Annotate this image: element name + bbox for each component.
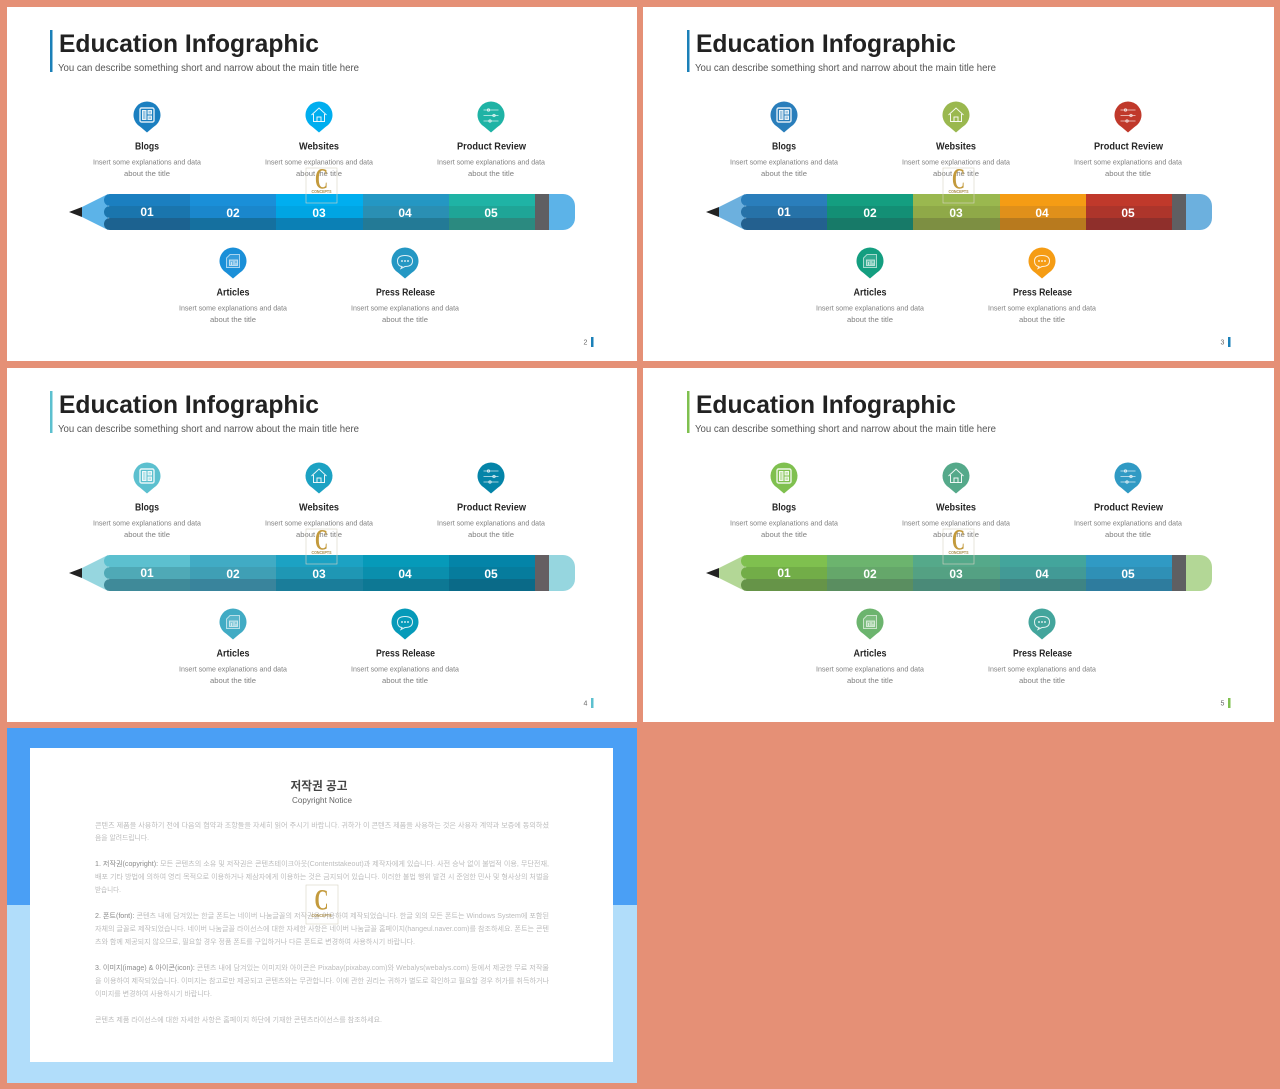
label: blogs: Insert some explanations and data [730,158,838,166]
label: articles: Insert some explanations and data [179,664,287,674]
clause 1 copyright: 받습니다. [95,885,121,894]
label: articles: about the title [847,676,893,685]
watermark: C [952,162,965,196]
label: product review [1074,142,1182,178]
clause 2 font: 츠와 함께 제공되지 않으므로, 필요할 경우 정품 폰트를 구입하거나 다른 폰트로 변경하여 사용하시기 바랍니다. [95,937,415,946]
label: websites: about the title [296,530,342,539]
watermark [943,162,974,203]
label: press release [988,288,1096,324]
subtitle: You can describe something short and narrow about the main title here [695,62,996,74]
label: articles [179,648,287,685]
icon: product review pin [1114,102,1142,132]
panel: copyright notice slide [7,728,637,1083]
clause 2 font: 2. 폰트(font): 콘텐츠 내에 담겨있는 한글 폰트는 네이버 나눔글꼴의 저작권을 이용하여 제작되었습니다. 한글 외의 모든 폰트는 Windows System에 포함된 [95,911,549,920]
label: product review: Product Review [1094,142,1163,152]
label: websites: Insert some explanations and data [265,518,373,528]
page number: 2 [584,340,588,346]
page number [1221,698,1230,708]
label: websites [265,502,373,539]
label: articles: Insert some explanations and data [179,304,287,312]
label: press release: about the title [1019,315,1065,324]
pencil chart: 02 [863,206,877,220]
pencil chart: 02 [863,567,877,581]
label: blogs [93,502,201,539]
label: product review: Product Review [457,142,526,152]
icon: product review pin [478,463,504,494]
page number: 4 [584,700,588,708]
label: product review: Insert some explanations and data [1074,158,1182,166]
icon: press release pin [1028,248,1056,278]
label: press release: Press Release [1013,648,1072,660]
icon: product review pin [478,102,504,132]
label: press release: Insert some explanations and data [351,304,459,312]
copyright intro text: 콘텐츠 제품을 사용하기 전에 다음의 협약과 조항들을 자세히 읽어 주시기 바랍니다. 귀하가 이 콘텐츠 제품을 사용하는 것은 사용자 계약과 보증에 동의하셨 [95,820,550,830]
label: articles [816,288,924,324]
label: websites: Insert some explanations and data [265,158,373,166]
title: Education Infographic [696,30,956,58]
label: articles [179,288,287,324]
icon: articles pin [220,609,246,640]
label: product review: Insert some explanations and data [437,158,545,166]
watermark: C [952,524,965,556]
pencil chart: 01 [777,205,791,219]
copyright intro text: 음을 알려드립니다. [95,833,149,842]
watermark: CONCEPTS [948,189,969,194]
clause 1 copyright: 1. 저작권(copyright): 모든 콘텐츠의 소유 및 저작권은 콘텐츠테이크아웃(Contentstakeout)과 제작자에게 있습니다. 사전 승낙 없이 불법적 이용, 무단전재, [95,859,549,868]
clause 2 font [95,911,549,946]
pencil chart: 05 [484,206,498,220]
icon: blogs pin [770,102,798,132]
panel: slide 5 green palette [643,368,1274,722]
icon: blogs pin [134,102,160,132]
icon: press release pin [392,609,418,640]
label: product review [437,142,545,178]
clause 3 image and icon: 을 이용하여 제작되었습니다. 이미지는 참고로만 제공되고 콘텐츠와는 무관합니다. 이에 관한 권리는 귀하가 별도로 확인하고 필요할 경우 허가를 취득하거나 [95,976,550,985]
title accent bar [687,391,690,433]
pencil chart: 04 [1035,206,1049,220]
label: press release [988,648,1096,685]
label: press release: Insert some explanations and data [988,664,1096,674]
icon: websites pin [306,102,332,132]
watermark [306,162,337,203]
label: product review: Product Review [1094,502,1163,514]
pencil chart: 03 [949,206,963,220]
icon: articles pin [220,248,246,278]
page number [584,698,594,708]
pencil chart: 05 [484,567,498,581]
label: websites: about the title [296,169,342,178]
icon: blogs pin [134,463,160,494]
icon: articles pin [856,248,884,278]
label: product review: about the title [468,530,514,539]
label: press release: Press Release [376,288,435,298]
label: websites: Insert some explanations and data [902,518,1010,528]
pencil chart [706,555,1212,591]
label: articles: Insert some explanations and data [816,664,924,674]
copyright subheading: Copyright Notice [292,795,352,805]
clause 1 copyright: 배포 기타 방법에 의하여 영리 목적으로 이용하거나 제삼자에게 이용하는 것은 금지되어 있습니다. 이러한 불법 행위 발견 시 준엄한 민사 및 형사상의 처벌을 [95,872,550,881]
closing note: 콘텐츠 제품 라이선스에 대한 자세한 사항은 홈페이지 하단에 기재한 콘텐츠라이선스를 참조하세요. [95,1015,382,1024]
label: blogs [93,142,201,178]
subtitle: You can describe something short and narrow about the main title here [695,423,996,435]
page number: 5 [1221,700,1225,708]
pencil chart: 01 [140,566,154,580]
label: press release: about the title [382,315,428,324]
icon: press release pin [1028,609,1056,640]
pencil chart: 02 [226,206,240,220]
label: press release [351,648,459,685]
title accent bar [50,391,52,433]
label: articles: Articles [854,648,887,660]
pencil chart: 01 [140,205,154,219]
icon: websites pin [942,102,970,132]
icon: press release pin [392,248,418,278]
title: Education Infographic [59,30,319,58]
label: blogs: about the title [124,169,170,178]
label: articles: about the title [847,315,893,324]
watermark [306,524,337,564]
label: websites [902,142,1010,178]
label: press release: about the title [382,676,428,685]
pencil chart: 03 [949,567,963,581]
watermark: C [314,884,328,916]
label: blogs: Insert some explanations and data [93,158,201,166]
label: press release: Press Release [1013,288,1072,298]
label: blogs: about the title [761,169,807,178]
page number [1221,337,1230,347]
label: articles: about the title [210,315,256,324]
pencil chart: 02 [226,567,240,581]
pencil chart [706,194,1212,230]
title: Education Infographic [59,391,319,419]
label: product review [437,502,545,539]
watermark: CONCEPTS [948,550,969,555]
panel: slide 3 multicolour palette [643,7,1274,361]
label: product review: Product Review [457,502,526,514]
icon: websites pin [306,463,332,494]
label: product review: about the title [468,169,514,178]
pencil chart: 03 [312,567,326,581]
pencil chart: 05 [1121,206,1135,220]
watermark [306,884,338,924]
label: blogs [730,142,838,178]
pencil chart: 04 [1035,567,1049,581]
label: blogs: Blogs [135,142,159,152]
icon: articles pin [856,609,884,640]
pencil chart: 01 [777,566,791,580]
label: product review: Insert some explanations and data [437,518,545,528]
copyright heading: 저작권 공고 [290,778,348,793]
label: articles: Articles [854,288,887,298]
watermark: CONCEPTS [312,913,332,918]
title: Education Infographic [696,391,956,419]
label: blogs: about the title [761,530,807,539]
label: product review: about the title [1105,530,1151,539]
watermark [943,524,974,564]
label: press release: Insert some explanations and data [351,664,459,674]
watermark: CONCEPTS [312,189,332,194]
label: articles: Articles [216,648,250,660]
label: articles: Insert some explanations and data [816,304,924,312]
label: websites: about the title [933,530,979,539]
watermark: C [315,162,328,196]
subtitle: You can describe something short and narrow about the main title here [58,62,359,74]
panel: slide 4 teal palette [7,368,637,722]
label: websites: Websites [299,502,339,514]
label: press release: Press Release [376,648,435,660]
watermark: CONCEPTS [312,550,332,555]
pencil chart: 05 [1121,567,1135,581]
label: blogs: Blogs [772,142,796,152]
page number [584,337,594,347]
icon: blogs pin [770,463,798,494]
label: articles: Articles [216,288,250,298]
clause 2 font: 자체의 글꼴로 제작되었습니다. 네이버 나눔글꼴 라이선스에 대한 자세한 사항은 네이버 나눔글꼴 홈페이지(hangeul.naver.com)를 참조하세요. 폰트는 콘텐 [95,924,549,933]
subtitle: You can describe something short and narrow about the main title here [58,423,359,435]
label: blogs: Blogs [772,502,796,514]
label: blogs: Insert some explanations and data [93,518,201,528]
label: blogs [730,502,838,539]
clause 1 copyright [95,859,550,894]
pencil chart [69,194,575,230]
panel: slide 2 blue palette [7,7,637,361]
title accent bar [50,30,52,72]
label: websites: about the title [933,169,979,178]
title accent bar [687,30,690,72]
label: websites: Insert some explanations and data [902,158,1010,166]
label: articles [816,648,924,685]
clause 3 image and icon [95,963,550,998]
pencil chart: 04 [398,206,412,220]
copyright intro text [95,820,550,842]
label: websites [902,502,1010,539]
label: product review: Insert some explanations and data [1074,518,1182,528]
pencil chart: 04 [398,567,412,581]
label: websites: Websites [936,502,976,514]
label: product review [1074,502,1182,539]
label: websites [265,142,373,178]
label: websites: Websites [299,142,339,152]
page number: 3 [1221,340,1225,346]
label: blogs: about the title [124,530,170,539]
label: websites: Websites [936,142,976,152]
clause 3 image and icon: 이미지를 변경하여 사용하시기 바랍니다. [95,989,212,998]
label: articles: about the title [210,676,256,685]
label: blogs: Insert some explanations and data [730,518,838,528]
icon: websites pin [942,463,970,494]
label: press release: about the title [1019,676,1065,685]
clause 3 image and icon: 3. 이미지(image) & 아이콘(icon): 콘텐츠 내에 담겨있는 이미지와 아이콘은 Pixabay(pixabay.com)와 Webalys(webalys.com) 등에서 제공한 무료 저작물 [95,963,550,972]
pencil chart [69,555,575,591]
label: press release: Insert some explanations and data [988,304,1096,312]
watermark: C [315,524,328,556]
icon: product review pin [1114,463,1142,494]
pencil chart: 03 [312,206,326,220]
label: product review: about the title [1105,169,1151,178]
label: blogs: Blogs [135,502,159,514]
label: press release [351,288,459,324]
